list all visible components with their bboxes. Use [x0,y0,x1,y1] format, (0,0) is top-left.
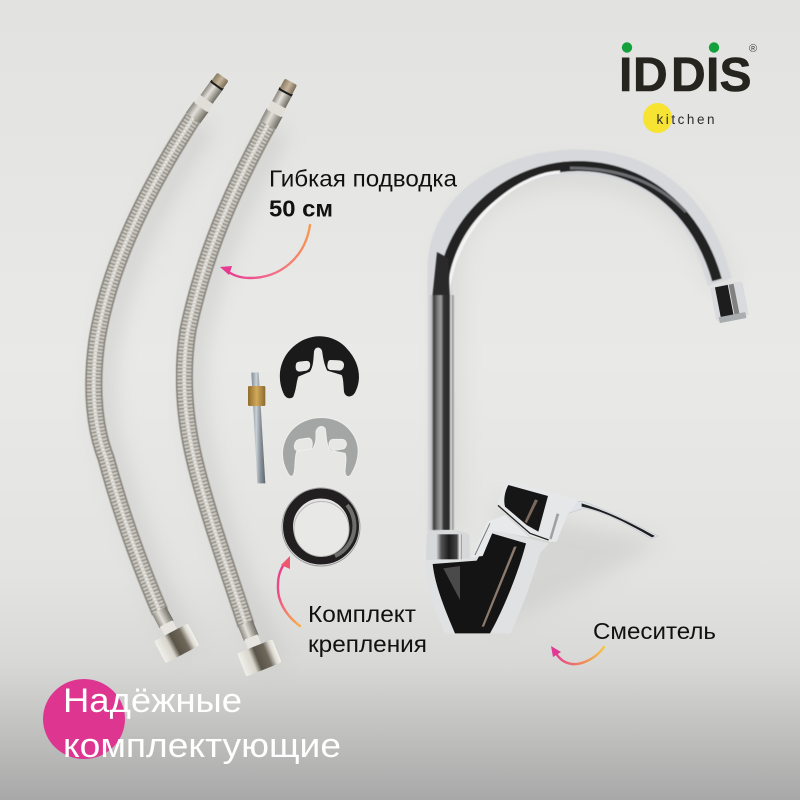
braided hose body [94,118,193,612]
callout: flexible hoses [220,166,457,278]
neck collar [426,530,470,560]
lever [567,501,658,539]
hose: left [94,71,230,663]
green dots [622,42,719,53]
aerator [710,281,749,324]
handle lower lip [498,505,549,540]
brand wordmark: IDDIS [619,49,752,102]
handle dark reflection [504,485,548,532]
callout: mixer [551,618,716,664]
zinc mounting plate [282,417,358,477]
callout text: Гибкая подводка [269,166,457,192]
mounting stud [248,372,265,483]
arrow [278,556,300,626]
faucet [426,162,749,633]
kitchen label: kitchen [656,112,714,127]
registered mark: ® [749,43,757,55]
callout: mounting kit [278,556,427,657]
base and handle [426,479,658,633]
top fitting [260,78,299,129]
callout text: Комплект [308,601,416,627]
handle body [497,479,578,542]
spout pipe [440,162,720,545]
arrow [220,225,310,278]
black mounting plate [280,336,359,398]
hose: right [184,78,299,677]
base body [426,530,549,633]
base highlights [443,566,460,600]
pipe bend transition [432,252,450,300]
yellow spot [643,103,672,133]
callout: mounting kit: крепления [308,631,427,657]
title [63,682,341,765]
lever dark edge [582,503,655,537]
top fitting [186,71,230,123]
logo: IDDIS kitchen [619,42,757,133]
vertical pipe section [428,295,454,530]
callout: flexible hoses: 50 см [269,196,333,222]
callout text: Смеситель [593,618,716,644]
arrow [551,646,604,664]
upper cartridge neck [472,515,530,557]
soft shadows [104,125,724,665]
braided hose body [184,125,268,625]
bottom union nut [142,601,199,663]
bottom union nut [228,616,282,677]
pink accent spot [43,679,125,759]
title: комплектующие [63,727,341,765]
title: Надёжные [63,682,242,720]
escutcheon ring [282,488,360,566]
base dark reflection [433,533,526,633]
